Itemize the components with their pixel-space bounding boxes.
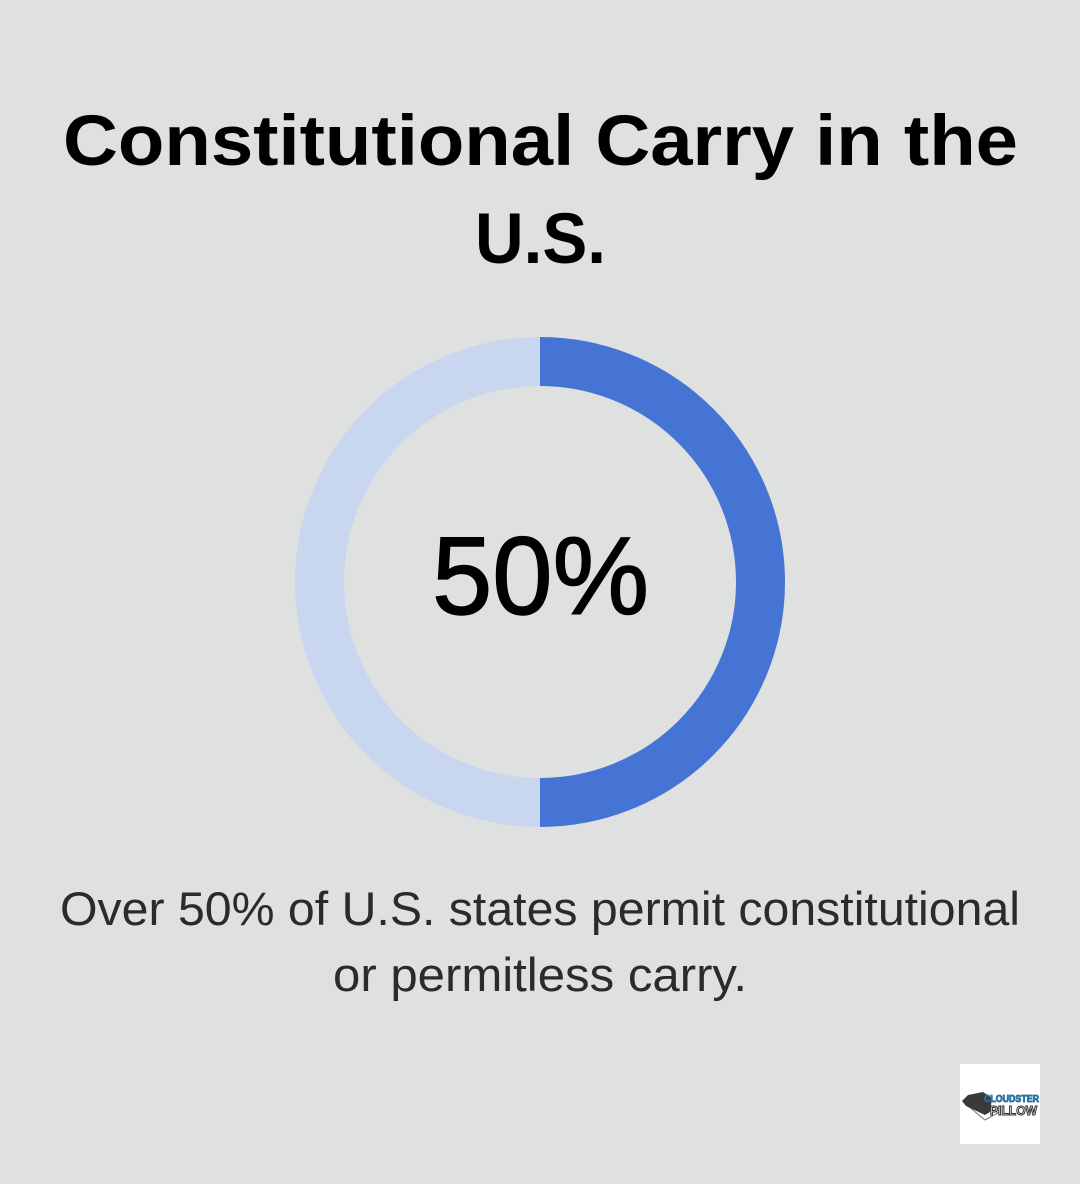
description text: or permitless carry. — [333, 948, 747, 1001]
description text: Over 50% of U.S. states permit constitutional — [60, 882, 1020, 935]
logo: Cloudster Pillow — [960, 1064, 1040, 1144]
icon: pillow — [962, 1092, 998, 1120]
logo wordmark: PILLOW — [990, 1103, 1038, 1118]
center value: 50% — [432, 515, 649, 638]
title — [63, 102, 1018, 279]
donut chart: 50% — [320, 362, 760, 802]
logo wordmark — [984, 1094, 1040, 1118]
title: Constitutional Carry in the — [63, 102, 1018, 181]
logo wordmark: CLOUDSTER — [984, 1094, 1040, 1105]
title: U.S. — [475, 200, 606, 279]
description text — [60, 882, 1020, 1001]
